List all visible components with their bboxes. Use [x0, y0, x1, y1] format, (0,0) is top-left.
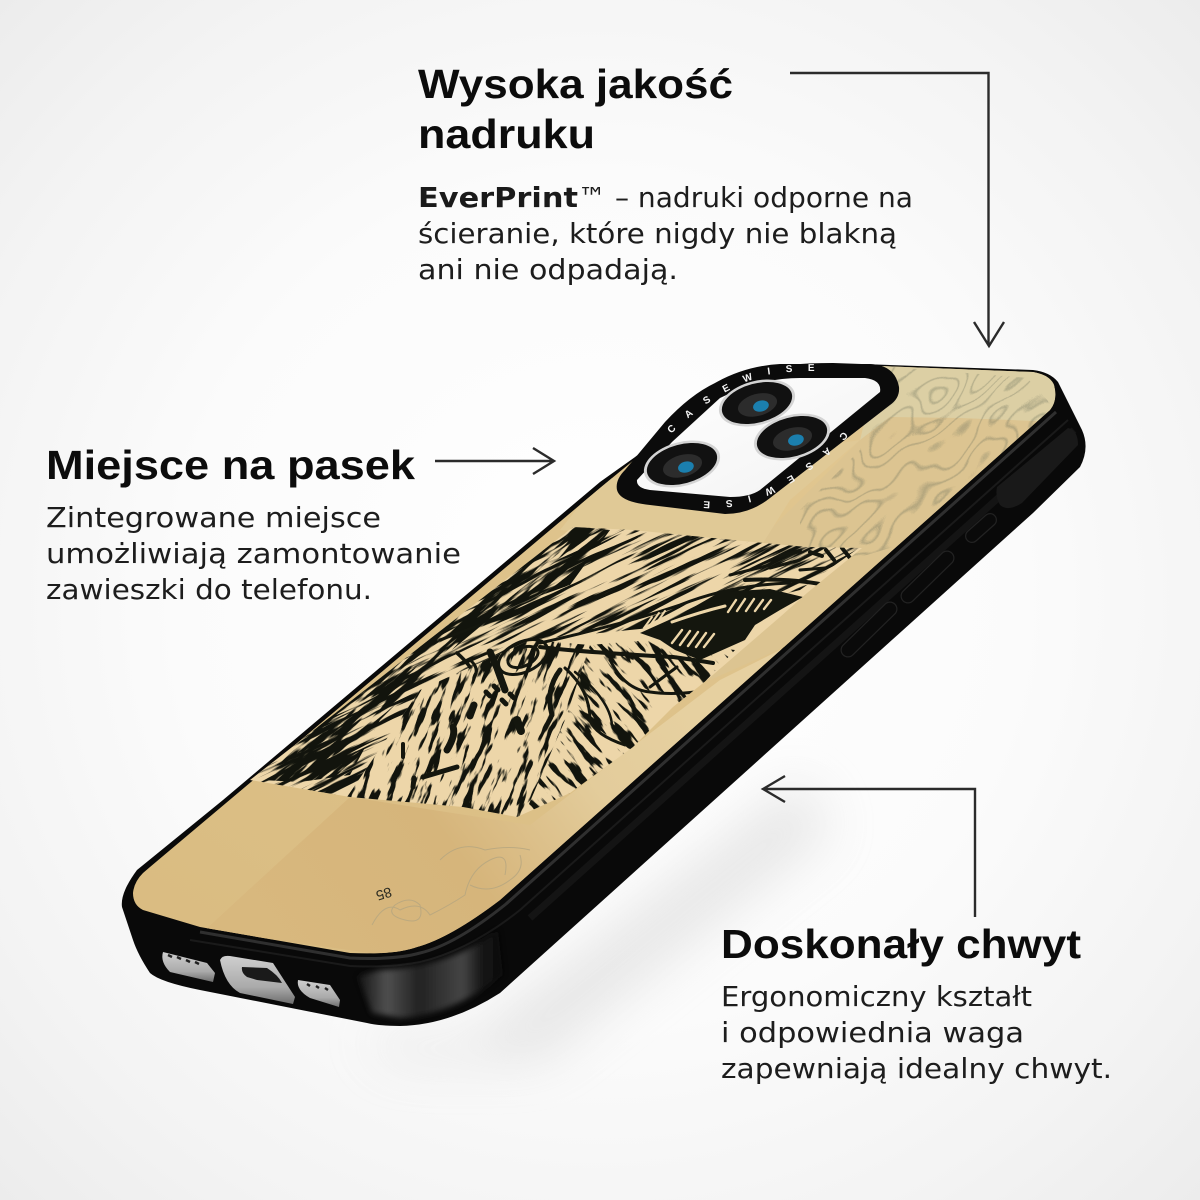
ring lettering: top: CASEWISE — [668, 364, 814, 432]
paper panel: centre — [560, 478, 776, 542]
engraving artwork — [250, 527, 862, 817]
heading: strap slot: Miejsce na pasek — [46, 442, 415, 488]
top right dashes — [730, 548, 850, 575]
text block: strap slot: Zintegrowane miejsce — [46, 502, 381, 534]
corner highlight — [358, 930, 503, 1018]
title: print quality — [418, 61, 733, 157]
text block: grip — [721, 981, 1112, 1085]
button: upper volume — [908, 558, 947, 596]
side bump — [996, 428, 1078, 508]
back print area — [133, 366, 1056, 954]
marble veins — [800, 367, 1050, 556]
camera plate — [637, 378, 880, 497]
bottom port: charging — [220, 956, 295, 1004]
text block: print quality: EverPrint — [418, 182, 578, 214]
paper panel: lower — [205, 640, 800, 960]
paper panel: middle — [784, 421, 1038, 648]
ring lettering: bottom: CASEWISE — [704, 432, 848, 508]
arrow: grip — [763, 776, 975, 917]
arrow: strap slot — [435, 448, 554, 474]
lower left streaks — [347, 641, 589, 817]
bottom port: left speaker — [162, 952, 215, 982]
lens: right — [749, 406, 835, 468]
phone shadow — [360, 780, 830, 1060]
text block: print quality: ani nie odpadają. — [418, 254, 678, 286]
upper streaks — [258, 527, 859, 794]
eye — [640, 589, 803, 660]
button: mute — [972, 520, 990, 536]
text block: strap slot: umożliwiają zamontowanie — [46, 538, 461, 570]
bottom port: right speaker — [298, 980, 340, 1007]
brow and stems — [403, 580, 825, 787]
text block: print quality — [418, 182, 913, 286]
heading: grip: Doskonały chwyt — [721, 921, 1081, 967]
case body — [122, 363, 1086, 1026]
text block: print quality: ™ – nadruki odporne na — [578, 182, 913, 214]
arrow: print quality — [790, 73, 1004, 346]
lens: left — [639, 433, 725, 495]
title: print quality: Wysoka jakość — [418, 61, 733, 107]
text block: strap slot: zawieszki do telefonu. — [46, 574, 372, 606]
dense left band — [268, 527, 610, 782]
text block: print quality: ścieranie, które nigdy nie blakną — [418, 218, 897, 250]
small mark: 85 — [374, 884, 394, 904]
phone case — [122, 363, 1086, 1064]
eye lashes — [644, 599, 771, 647]
lens: top — [714, 372, 800, 434]
lower right streaks — [529, 640, 735, 810]
swirl — [506, 644, 540, 670]
text block: grip: i odpowiednia waga — [721, 1017, 1024, 1049]
case side details — [190, 412, 1074, 966]
paper panel: upper — [860, 366, 1056, 440]
text block: strap slot — [46, 502, 461, 606]
text block: grip: zapewniają idealny chwyt. — [721, 1053, 1112, 1085]
wavy marks — [457, 653, 470, 667]
faint cloud doodles — [372, 847, 530, 925]
camera island — [616, 364, 900, 514]
button: lower volume — [848, 609, 890, 650]
text block: grip: Ergonomiczny kształt — [721, 981, 1032, 1013]
title: print quality: nadruku — [418, 111, 595, 157]
